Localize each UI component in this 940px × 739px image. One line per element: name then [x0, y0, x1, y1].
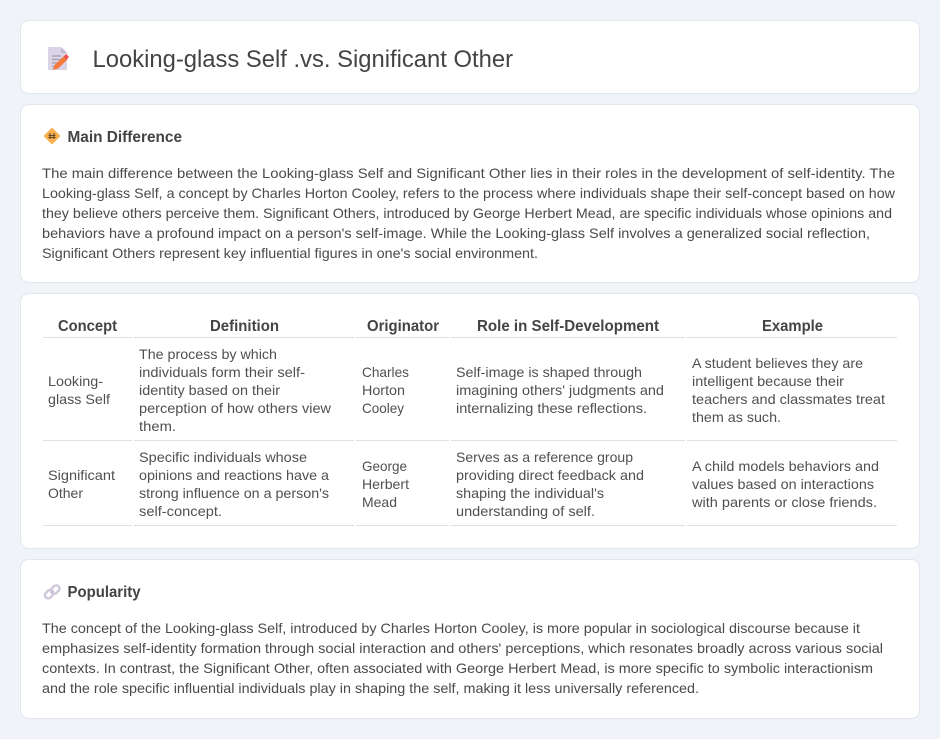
table header row: Concept — [58, 318, 118, 335]
panel: popularity — [20, 560, 920, 718]
popularity paragraph: The concept of the Looking-glass Self, introduced by Charles Horton Cooley, is more popular in sociological discourse because it — [42, 620, 860, 636]
table row: looking-glass self: perception of how others view — [139, 400, 332, 416]
table row: looking-glass self — [48, 346, 885, 434]
popularity paragraph: and the role specific influential individuals play in shaping the self, making it less universally referenced. — [42, 680, 699, 696]
table row: looking-glass self: The process by which — [139, 346, 277, 362]
table header row: Role in Self-Development — [477, 318, 660, 335]
panel: header — [20, 20, 920, 94]
table row: looking-glass self: imagining others' judgments and — [456, 382, 664, 398]
main difference paragraph: they believe others perceive them. Significant Others, introduced by George Herbert Mead, are specific individuals whose opinions and — [42, 205, 892, 221]
table row: significant other: opinions and reactions have a — [139, 467, 329, 483]
popularity paragraph: contexts. In contrast, the Significant Other, often associated with George Herbert Mead, is more specific to symbolic interactionism — [42, 660, 873, 676]
table row: significant other: Serves as a reference group — [456, 449, 633, 465]
table row: looking-glass self: Horton — [362, 382, 405, 398]
table row: looking-glass self: them. — [139, 418, 176, 434]
heading: main difference: Main Difference — [68, 129, 182, 146]
table row: looking-glass self: Charles — [362, 364, 409, 380]
table row: looking-glass self: them as such. — [692, 409, 781, 425]
table row: significant other: Specific individuals whose — [139, 449, 307, 465]
panel: comparison table — [20, 294, 920, 548]
main difference paragraph — [42, 165, 896, 261]
title: Looking-glass Self .vs. Significant Other — [92, 46, 513, 73]
table header row: Definition — [210, 318, 279, 335]
table header row: Originator — [367, 318, 439, 335]
table header row: Example — [762, 318, 823, 335]
table row: significant other: A child models behaviors and — [692, 458, 879, 474]
table row: significant other: George — [362, 458, 407, 474]
main difference paragraph: Looking-glass Self, a concept by Charles Horton Cooley, refers to the process where individuals shape their self-concept based on how — [42, 185, 896, 201]
table row: significant other: Other — [48, 485, 83, 501]
table row: looking-glass self: intelligent because their — [692, 373, 844, 389]
icon: chain link — [44, 584, 61, 600]
table row: looking-glass self: individuals form their self- — [139, 364, 305, 380]
table row: looking-glass self: internalizing these reflections. — [456, 400, 647, 416]
table row: significant other: shaping the individual's — [456, 485, 604, 501]
table row: looking-glass self: teachers and classmates treat — [692, 391, 885, 407]
table row: significant other: providing direct feedback and — [456, 467, 644, 483]
main difference paragraph: Significant Others represent key influential figures in one's social environment. — [42, 245, 538, 261]
table row: looking-glass self: A student believes they are — [692, 355, 863, 371]
table row: looking-glass self: Looking- — [48, 373, 103, 389]
table row: significant other — [48, 449, 879, 519]
table row: significant other: Herbert — [362, 476, 409, 492]
table row: significant other: with parents or close friends. — [691, 494, 877, 510]
table row: looking-glass self: glass Self — [48, 391, 110, 407]
table row: significant other: values based on interactions — [692, 476, 874, 492]
panel: main difference — [20, 104, 920, 282]
icon: warning diamond — [44, 128, 60, 144]
table row: significant other: strong influence on a person's — [139, 485, 329, 501]
table row: significant other: Mead — [362, 494, 397, 510]
main difference paragraph: behaviors have a profound impact on a person's self-image. While the Looking-glass Self involves a generalized social reflection, — [42, 225, 870, 241]
icon: document with pencil — [48, 47, 69, 70]
table row: looking-glass self: identity based on their — [139, 382, 280, 398]
popularity paragraph: emphasizes self-identity formation through social interaction and others' perceptions, which resonates broadly across various social — [42, 640, 883, 656]
popularity paragraph — [42, 620, 883, 696]
table row: significant other: understanding of self. — [456, 503, 595, 519]
heading: popularity: Popularity — [68, 584, 141, 601]
table row: looking-glass self: Self-image is shaped through — [456, 364, 642, 380]
table row: significant other: Significant — [48, 467, 115, 483]
table row: significant other: self-concept. — [139, 503, 222, 519]
table header row — [58, 318, 823, 335]
table row: looking-glass self: Cooley — [362, 400, 404, 416]
main difference paragraph: The main difference between the Looking-glass Self and Significant Other lies in their roles in the development of self-identity. The — [42, 165, 895, 181]
